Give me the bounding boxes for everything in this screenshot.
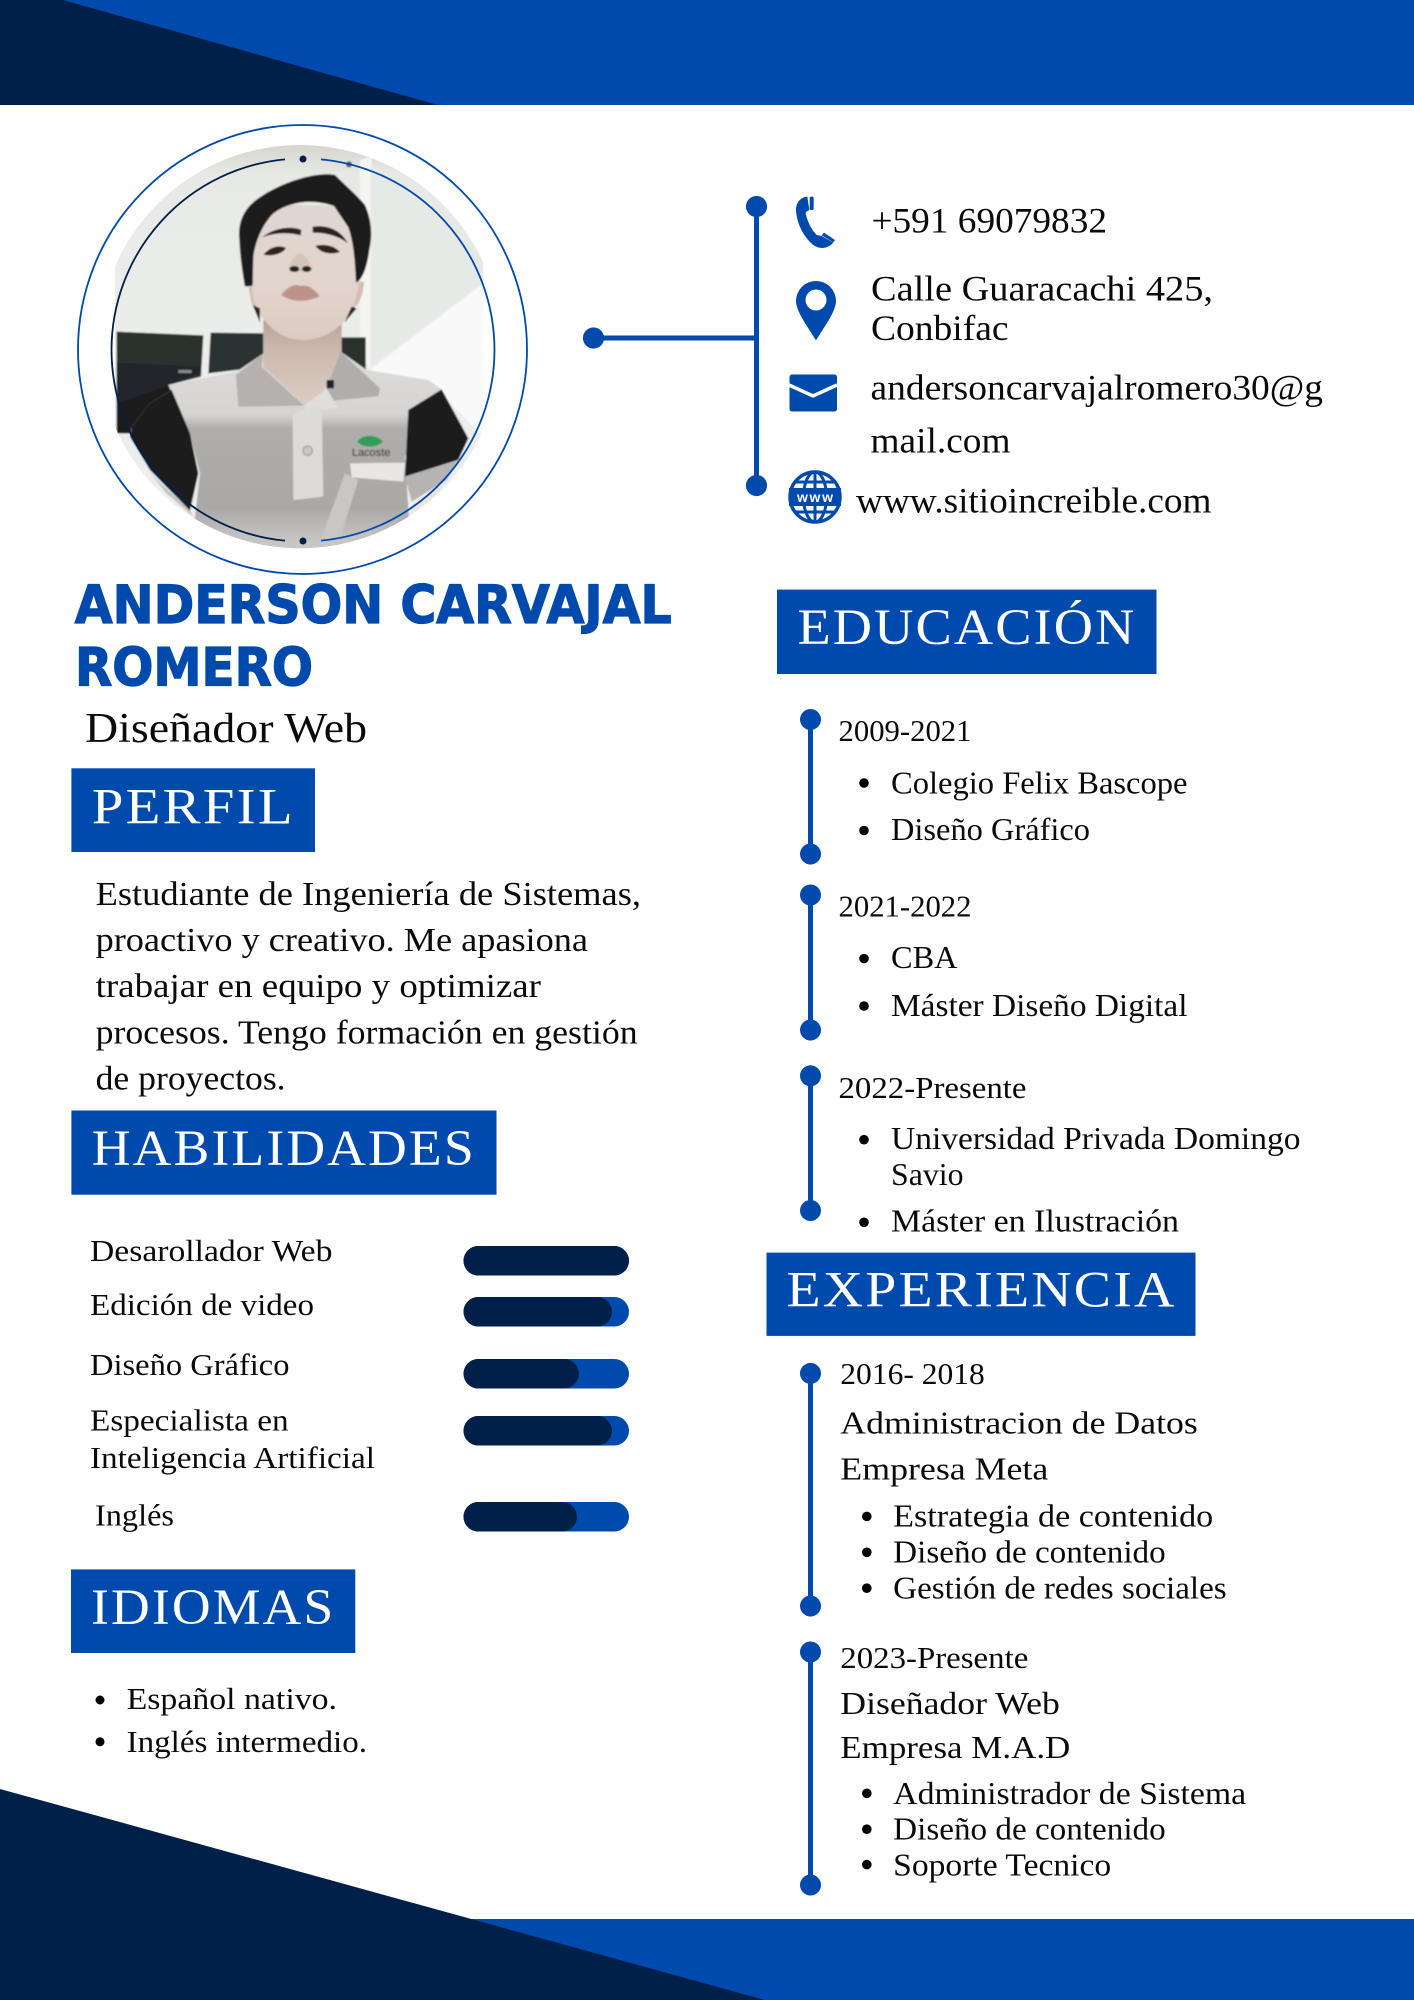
footer band: [0, 1789, 1414, 2000]
heading: idiomas: [71, 1569, 355, 1653]
education entry 2022-presente: Máster en Ilustración: [891, 1202, 1179, 1238]
heading: habilidades: [71, 1110, 497, 1195]
experience entry 2023-presente: 2023-Presente: [840, 1640, 1028, 1675]
skill: diseno grafico: Diseño Gráfico: [90, 1347, 290, 1382]
header band: [0, 0, 1414, 105]
skill: desarrollador web: [90, 1233, 629, 1276]
icon: location pin: [796, 281, 836, 340]
education entry 2009-2021: 2009-2021: [838, 713, 972, 748]
education entry 2021-2022: Máster Diseño Digital: [891, 987, 1188, 1023]
icon: globe: [789, 472, 841, 522]
languages list: Español nativo.: [127, 1681, 337, 1716]
profile paragraph: Estudiante de Ingeniería de Sistemas,: [96, 876, 641, 913]
experience entry 2023-presente: Administrador de Sistema: [893, 1775, 1246, 1811]
contact connector: [583, 196, 767, 496]
skill: ingles: Inglés: [95, 1498, 174, 1532]
profile paragraph: [96, 876, 641, 1098]
education entry 2009-2021: Diseño Gráfico: [891, 811, 1090, 847]
education entry 2022-presente: Universidad Privada Domingo: [891, 1120, 1300, 1156]
experience entry 2016-2018: [800, 1356, 1227, 1616]
experience entry 2016-2018: Administracion de Datos: [840, 1404, 1198, 1440]
contact: email: [870, 368, 1323, 460]
profile paragraph: proactivo y creativo. Me apasiona: [96, 922, 588, 959]
experience entry 2016-2018: Empresa Meta: [840, 1450, 1048, 1486]
timeline: [800, 1065, 821, 1221]
skill: edicion de video: [90, 1287, 629, 1326]
profile photo: [115, 145, 484, 548]
heading: educacion: [777, 590, 1156, 674]
contact: address: [871, 268, 1213, 348]
education entry 2022-presente: [800, 1065, 1300, 1238]
name: ROMERO: [75, 637, 313, 698]
profile paragraph: de proyectos.: [96, 1060, 286, 1098]
shirt logo: Lacoste: [352, 447, 390, 459]
photo frame: inner arcs and dots: [112, 156, 494, 544]
experience entry 2016-2018: Estrategia de contenido: [893, 1497, 1213, 1533]
heading: habilidades: HABILIDADES: [92, 1121, 476, 1177]
job title: Diseñador Web: [85, 706, 367, 752]
experience entry 2016-2018: Gestión de redes sociales: [893, 1570, 1227, 1606]
heading: experiencia: EXPERIENCIA: [786, 1263, 1176, 1319]
contact: email: andersoncarvajalromero30@g: [870, 368, 1323, 408]
contact: address: Conbifac: [871, 308, 1008, 348]
experience entry 2023-presente: Diseñador Web: [840, 1685, 1060, 1721]
contact: website: www.sitioincreible.com: [856, 480, 1212, 520]
experience entry 2016-2018: 2016- 2018: [840, 1356, 985, 1391]
heading: perfil: PERFIL: [92, 780, 295, 836]
skill: diseno grafico: [90, 1347, 629, 1388]
contact: email: mail.com: [870, 420, 1010, 460]
experience entry 2023-presente: [800, 1640, 1246, 1896]
experience entry 2016-2018: Diseño de contenido: [893, 1533, 1166, 1569]
photo frame: outer ring: [78, 125, 527, 574]
timeline: [800, 1642, 821, 1896]
skill: ingles: [95, 1498, 629, 1532]
experience entry 2023-presente: Soporte Tecnico: [893, 1846, 1111, 1882]
name: [75, 575, 672, 698]
skills list: [90, 1233, 629, 1532]
profile paragraph: procesos. Tengo formación en gestión: [96, 1014, 638, 1052]
heading: experiencia: [766, 1253, 1196, 1336]
heading: idiomas: IDIOMAS: [91, 1580, 335, 1636]
skill: edicion de video: Edición de video: [90, 1287, 314, 1322]
heading: educacion: EDUCACIÓN: [798, 600, 1136, 656]
contact: phone number: +591 69079832: [872, 200, 1107, 240]
heading: perfil: [71, 768, 315, 852]
experience entry 2023-presente: Empresa M.A.D: [840, 1729, 1070, 1765]
education entry 2021-2022: CBA: [891, 939, 958, 975]
experience entry 2023-presente: Diseño de contenido: [893, 1811, 1166, 1847]
timeline: [800, 709, 821, 864]
timeline: [800, 1363, 821, 1616]
education entry 2021-2022: [800, 884, 1188, 1040]
icon: envelope: [789, 374, 837, 412]
skill: inteligencia artificial: Especialista en: [90, 1403, 289, 1438]
timeline: [800, 884, 821, 1040]
icon: phone: [796, 197, 835, 248]
education entry 2009-2021: [800, 709, 1188, 864]
education entry 2022-presente: 2022-Presente: [838, 1070, 1026, 1105]
profile paragraph: trabajar en equipo y optimizar: [96, 968, 541, 1005]
name: ANDERSON CARVAJAL: [75, 575, 672, 636]
shirt logo: [352, 436, 390, 459]
contact: address: Calle Guaracachi 425,: [871, 268, 1213, 308]
education entry 2022-presente: Savio: [891, 1156, 964, 1192]
icon: globe: www: [796, 489, 833, 505]
education entry 2021-2022: 2021-2022: [838, 888, 972, 924]
skill: inteligencia artificial: Inteligencia Artificial: [90, 1440, 375, 1475]
education entry 2009-2021: Colegio Felix Bascope: [891, 764, 1188, 800]
languages list: [96, 1681, 367, 1759]
skill: desarrollador web: Desarollador Web: [90, 1233, 332, 1268]
skill: inteligencia artificial: [90, 1403, 629, 1475]
languages list: Inglés intermedio.: [127, 1724, 367, 1759]
